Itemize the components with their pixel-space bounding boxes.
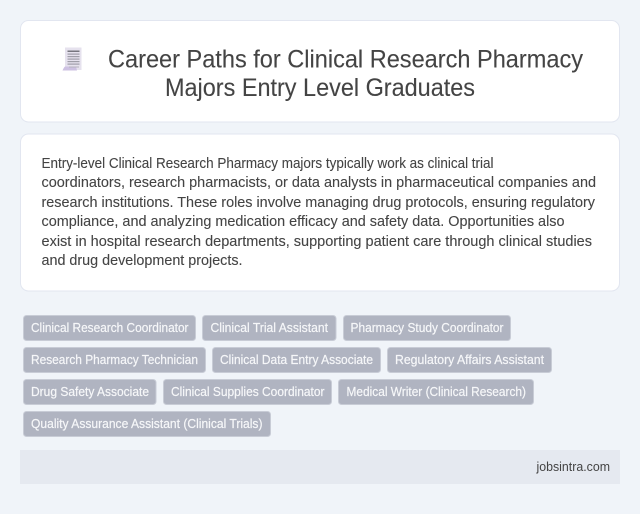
text block: description: coordinators, research pharmacists, or data analysts in pharmaceutical companies and bbox=[42, 174, 596, 191]
tag: Medical Writer (Clinical Research): Medical Writer (Clinical Research) bbox=[346, 385, 526, 399]
tag: Pharmacy Study Coordinator: Pharmacy Study Coordinator bbox=[350, 321, 504, 335]
tag: Clinical Supplies Coordinator bbox=[164, 380, 332, 404]
tag: Research Pharmacy Technician bbox=[24, 348, 206, 372]
tag: Medical Writer (Clinical Research) bbox=[338, 380, 534, 404]
text block: description: Entry-level Clinical Research Pharmacy majors typically work as clinical trial bbox=[42, 155, 494, 172]
tag: Quality Assurance Assistant (Clinical Trials) bbox=[24, 412, 270, 436]
text block: description: compliance, and analyzing medication efficacy and safety data. Opportunities also bbox=[42, 213, 564, 230]
tag: Clinical Supplies Coordinator: Clinical Supplies Coordinator bbox=[171, 385, 324, 399]
tag: Quality Assurance Assistant (Clinical Trials): Quality Assurance Assistant (Clinical Trials) bbox=[31, 417, 262, 431]
tag: Drug Safety Associate bbox=[24, 380, 156, 404]
icon: document scroll bbox=[62, 48, 82, 70]
tag: Clinical Trial Assistant bbox=[202, 316, 336, 340]
tag: Research Pharmacy Technician: Research Pharmacy Technician bbox=[31, 353, 198, 367]
title: Career Paths for Clinical Research Pharmacy bbox=[108, 46, 583, 74]
tag: Clinical Research Coordinator bbox=[24, 316, 196, 340]
tag: Regulatory Affairs Assistant bbox=[388, 348, 552, 372]
panel: description bbox=[20, 134, 620, 291]
text block: description: and drug development projects. bbox=[42, 252, 242, 269]
tag: Clinical Research Coordinator: Clinical Research Coordinator bbox=[31, 321, 188, 335]
tag list: career paths bbox=[24, 316, 552, 436]
tag: Clinical Trial Assistant: Clinical Trial Assistant bbox=[210, 321, 329, 335]
tag: Clinical Data Entry Associate: Clinical Data Entry Associate bbox=[220, 353, 373, 367]
title: Majors Entry Level Graduates bbox=[165, 74, 475, 102]
tag: Regulatory Affairs Assistant: Regulatory Affairs Assistant bbox=[395, 353, 545, 367]
panel: title card bbox=[20, 20, 620, 122]
footer bar bbox=[20, 450, 620, 484]
tag: Drug Safety Associate: Drug Safety Associate bbox=[31, 385, 149, 399]
tag: Clinical Data Entry Associate bbox=[212, 348, 380, 372]
text block: description: exist in hospital research departments, supporting patient care through clinical studies bbox=[42, 233, 592, 250]
tag: Pharmacy Study Coordinator bbox=[344, 316, 510, 340]
text block: description bbox=[42, 155, 596, 269]
footer: site name: jobsintra.com bbox=[536, 460, 610, 474]
text block: description: research institutions. These roles involve managing drug protocols, ensuring regulatory bbox=[42, 194, 595, 211]
title bbox=[108, 46, 583, 102]
